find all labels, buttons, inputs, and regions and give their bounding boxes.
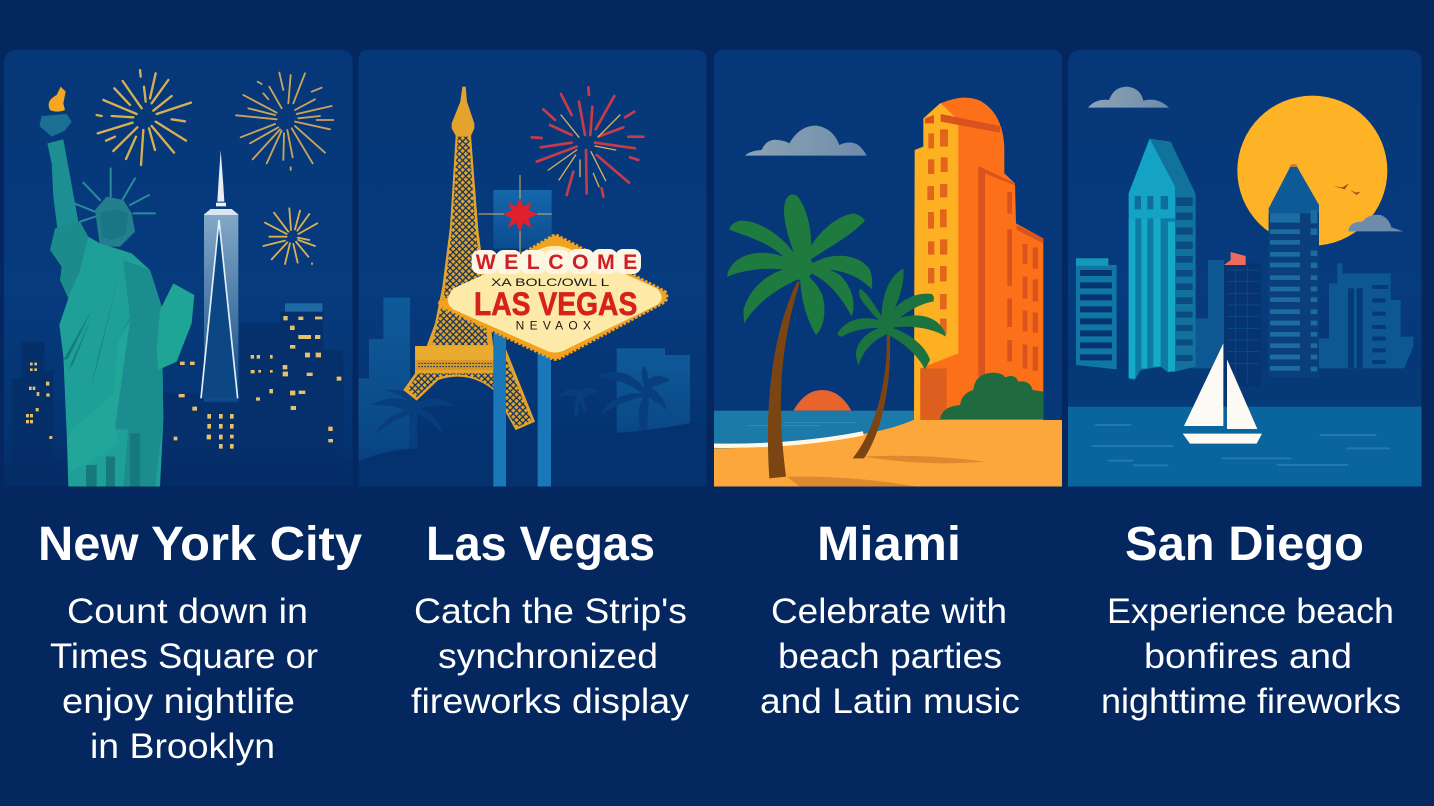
heading: Miami: Miami bbox=[817, 518, 961, 571]
birds bbox=[1333, 183, 1361, 195]
panel: New York City illustration bbox=[4, 50, 353, 487]
moon bbox=[1237, 96, 1387, 246]
light beams bbox=[493, 333, 551, 487]
heading: San Diego: San Diego bbox=[1125, 518, 1364, 571]
heading: Las Vegas: Las Vegas bbox=[426, 518, 655, 571]
sand beach bbox=[714, 420, 1062, 487]
panel: San Diego illustration bbox=[1068, 50, 1422, 487]
cloud: upper bbox=[1088, 87, 1169, 108]
description: Las Vegas: fireworks display bbox=[411, 682, 690, 721]
statue of liberty bbox=[39, 87, 194, 487]
tower: moon silhouette bbox=[1269, 164, 1319, 377]
hotel building bbox=[914, 97, 1043, 420]
description: San Diego: nighttime fireworks bbox=[1101, 682, 1401, 721]
description: New York City: in Brooklyn bbox=[90, 727, 275, 766]
description: Miami: and Latin music bbox=[760, 682, 1020, 721]
sign welcome tiles bbox=[472, 249, 641, 274]
palm: small bbox=[837, 268, 946, 458]
description: New York City bbox=[50, 592, 318, 766]
skyline: Las Vegas bbox=[358, 298, 690, 462]
description: San Diego bbox=[1101, 592, 1401, 721]
skyline: New York bbox=[12, 312, 344, 432]
palm silhouettes bbox=[371, 367, 670, 453]
panel: Miami illustration bbox=[714, 50, 1062, 487]
firework: red burst bbox=[532, 87, 643, 197]
sun bbox=[793, 390, 851, 411]
text block: New York City bbox=[38, 518, 362, 766]
light beam upper block bbox=[493, 190, 552, 248]
bay water bbox=[1068, 407, 1422, 487]
description: Miami: Celebrate with bbox=[771, 592, 1007, 631]
building windows bbox=[26, 316, 341, 449]
sign: Welcome to Las Vegas: XA BOLC/OWL L bbox=[491, 277, 609, 289]
text block: Las Vegas bbox=[411, 518, 690, 721]
description: San Diego: bonfires and bbox=[1144, 637, 1352, 676]
description: New York City: Count down in bbox=[67, 592, 308, 631]
description: New York City: Times Square or bbox=[50, 637, 318, 676]
tower: dark mid with flag bbox=[1224, 252, 1261, 387]
sea bbox=[714, 411, 921, 449]
sign: Welcome to Las Vegas: NEVAOX bbox=[516, 319, 591, 333]
tower: One World Trade Center bbox=[201, 150, 238, 402]
sailboat bbox=[1183, 343, 1262, 444]
description: Las Vegas: synchronized bbox=[438, 637, 658, 676]
sign: Welcome to Las Vegas: LAS VEGAS bbox=[474, 285, 637, 322]
description: Las Vegas: Catch the Strip's bbox=[414, 592, 687, 631]
text block: San Diego bbox=[1101, 518, 1401, 721]
background buildings bbox=[1192, 260, 1414, 368]
palm: large bbox=[727, 194, 872, 478]
description: San Diego: Experience beach bbox=[1107, 592, 1394, 631]
sign star bbox=[478, 175, 552, 253]
description: Miami bbox=[760, 592, 1020, 721]
text block: Miami bbox=[760, 518, 1020, 721]
bush bbox=[940, 373, 1043, 419]
tower: Eiffel bbox=[403, 87, 535, 430]
sign: Welcome to Las Vegas bbox=[440, 235, 667, 359]
sign: Welcome to Las Vegas: WELCOME bbox=[476, 250, 637, 274]
description: Miami: beach parties bbox=[778, 637, 1002, 676]
fireworks: gold bursts bbox=[97, 70, 333, 264]
cloud: right bbox=[1348, 215, 1403, 231]
panel: Las Vegas illustration bbox=[358, 50, 707, 487]
description: Las Vegas bbox=[411, 592, 690, 721]
tower: teal left block bbox=[1076, 258, 1117, 369]
windows: right building bbox=[1348, 285, 1388, 368]
tower: teal tall bbox=[1129, 139, 1196, 380]
heading: New York City: New York City bbox=[38, 518, 362, 571]
cloud bbox=[745, 126, 867, 156]
description: New York City: enjoy nightlife bbox=[62, 682, 295, 721]
